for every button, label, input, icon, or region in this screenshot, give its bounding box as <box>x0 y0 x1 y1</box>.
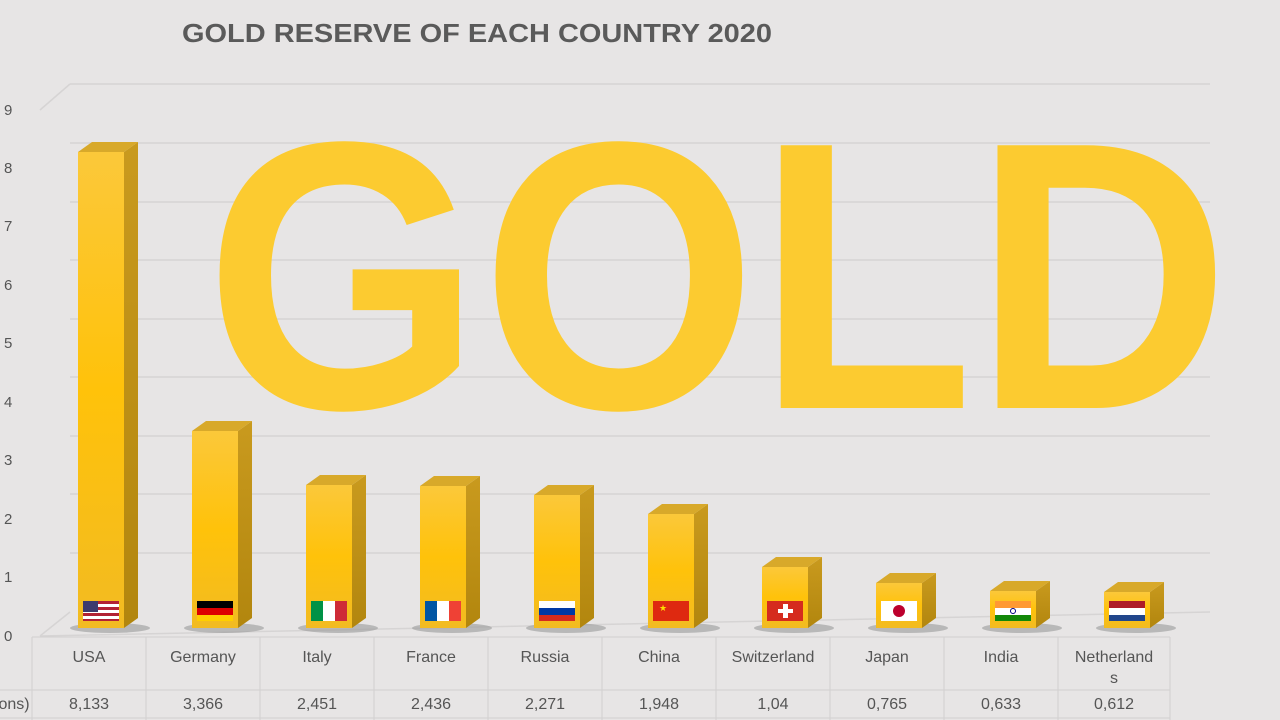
text: 0,612 <box>1094 696 1134 713</box>
text: 2,436 <box>411 696 451 713</box>
text: 8,133 <box>69 696 109 713</box>
y axis labels: 0 <box>4 628 12 645</box>
y axis labels: 5 <box>4 335 12 352</box>
text: 2,271 <box>525 696 565 713</box>
text: Italy <box>302 649 332 666</box>
y axis labels: 3 <box>4 452 12 469</box>
text: India <box>984 649 1018 666</box>
text: 2,451 <box>297 696 337 713</box>
text: USA <box>73 649 106 666</box>
text: Netherland <box>1075 649 1153 666</box>
text: 1,04 <box>757 696 789 713</box>
y axis labels: 1 <box>4 569 12 586</box>
flags: ★ <box>659 603 667 613</box>
y axis labels: 8 <box>4 160 12 177</box>
grid lines <box>40 84 1210 636</box>
bars <box>70 142 1176 633</box>
y axis labels <box>4 102 12 645</box>
flags <box>83 601 1145 621</box>
y axis labels: 9 <box>4 102 12 119</box>
y axis labels: 6 <box>4 277 12 294</box>
text: 0,765 <box>867 696 907 713</box>
y axis labels: 4 <box>4 394 12 411</box>
text: China <box>638 649 680 666</box>
text: Japan <box>865 649 909 666</box>
title: GOLD RESERVE OF EACH COUNTRY 2020 <box>182 18 772 48</box>
text: 1,948 <box>639 696 679 713</box>
y axis labels: 7 <box>4 218 12 235</box>
data table <box>0 637 1170 720</box>
text: s <box>1110 670 1118 687</box>
y axis labels: 2 <box>4 511 12 528</box>
GOLD overlay text: GOLD <box>205 62 1230 489</box>
text: Germany <box>170 649 236 666</box>
text: 3,366 <box>183 696 223 713</box>
text: Russia <box>521 649 570 666</box>
text: Switzerland <box>732 649 814 666</box>
text: 0,633 <box>981 696 1021 713</box>
text: France <box>406 649 456 666</box>
